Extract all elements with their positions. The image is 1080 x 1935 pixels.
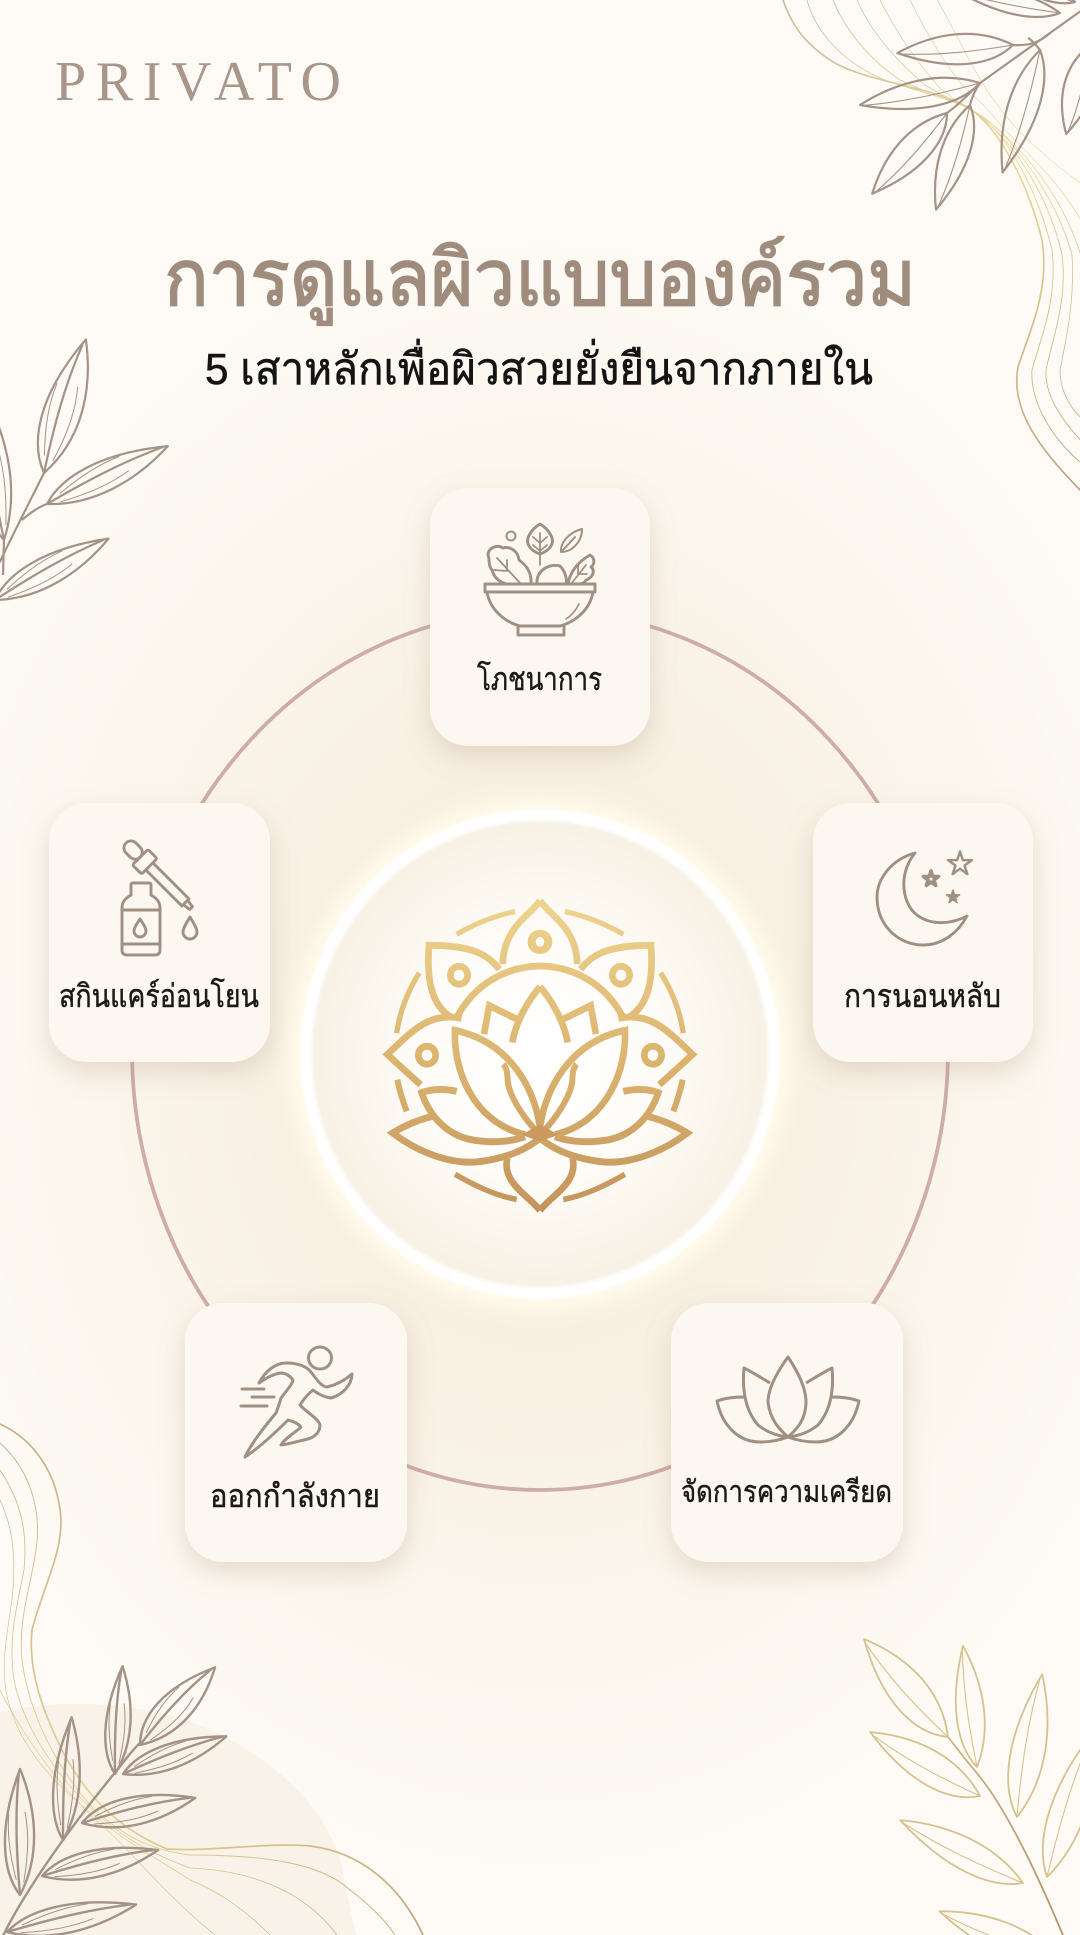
card: exercise — [185, 1303, 407, 1562]
card: nutrition — [430, 488, 650, 746]
title: การดูแลผิวแบบองค์รวม — [164, 234, 916, 325]
connecting ring — [132, 610, 948, 1490]
card: sleep — [813, 803, 1033, 1062]
subtitle: 5 เสาหลักเพื่อผิวสวยยั่งยืนจากภายใน — [205, 338, 873, 394]
wave lines: top right — [783, 0, 1080, 495]
icon: moon and stars — [877, 852, 972, 945]
leaf branch: left — [0, 334, 174, 612]
leaf branch: top right — [858, 0, 1080, 214]
center glowing circle — [300, 809, 780, 1299]
icon: lotus — [717, 1357, 859, 1442]
label: sleep: การนอนหลับ — [844, 978, 1001, 1014]
card: gentle skincare — [49, 803, 270, 1062]
leaf branch: bottom left — [2, 1656, 230, 1935]
label: exercise: ออกกำลังกาย — [210, 1478, 380, 1514]
icon: runner — [241, 1347, 352, 1457]
brand logo: PRIVATO — [55, 51, 341, 113]
leaf branch: bottom right gold — [849, 1627, 1080, 1935]
icon: salad bowl — [485, 524, 595, 635]
decorative beige blob — [0, 1704, 356, 1935]
label: stress management: จัดการความเครียด — [681, 1476, 892, 1509]
center lotus logo — [387, 901, 693, 1210]
label: gentle skincare: สกินแคร์อ่อนโยน — [59, 978, 259, 1014]
card: stress management — [671, 1303, 903, 1562]
icon: serum bottle and dropper — [118, 835, 199, 955]
wave lines: bottom left — [0, 1424, 423, 1935]
label: nutrition: โภชนาการ — [477, 661, 602, 697]
